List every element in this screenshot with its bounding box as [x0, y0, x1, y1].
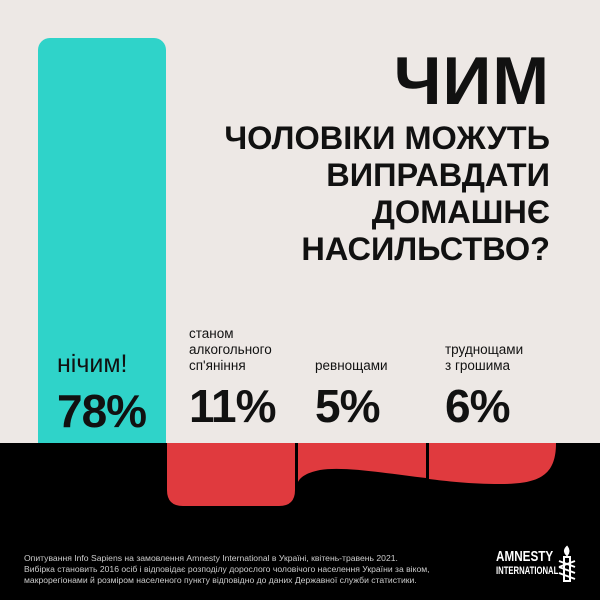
- logo: Amnesty International: INTERNATIONAL: [496, 565, 558, 577]
- stat: alcohol 11%: [189, 326, 276, 432]
- title: ВИПРАВДАТИ: [326, 157, 550, 193]
- footnote: Вибірка становить 2016 осіб і відповідає розподілу дорослого чоловічого населення України за віком,: [24, 564, 430, 574]
- red bar: money: [429, 443, 556, 484]
- title: [224, 43, 550, 267]
- icon: candle in barbed wire: [558, 546, 576, 582]
- title: ЧИМ: [394, 43, 550, 119]
- title: ЧОЛОВІКИ МОЖУТЬ: [224, 120, 550, 156]
- stat: money 6%: [445, 342, 523, 432]
- stat: money 6%: труднощами: [445, 342, 523, 357]
- cyan bar: nothing: [38, 38, 166, 443]
- logo: Amnesty International: [496, 546, 576, 582]
- stat: jealousy 5%: 5%: [315, 380, 379, 432]
- stat: alcohol 11%: станом: [189, 326, 234, 341]
- stat: alcohol 11%: алкогольного: [189, 342, 272, 357]
- title: НАСИЛЬСТВО?: [301, 231, 550, 267]
- stat: alcohol 11%: 11%: [189, 380, 276, 432]
- stat: alcohol 11%: сп'яніння: [189, 358, 246, 373]
- stat: nothing 78%: [57, 350, 146, 437]
- stat: jealousy 5%: ревнощами: [315, 358, 388, 373]
- black bottom band: [0, 443, 600, 600]
- title: ДОМАШНЄ: [372, 194, 550, 230]
- logo: Amnesty International: AMNESTY: [496, 548, 553, 565]
- stat: nothing 78%: 78%: [57, 385, 146, 437]
- footnote: Опитування Info Sapiens на замовлення Amnesty International в Україні, квітень-травень 2021.: [24, 553, 398, 563]
- red bar: jealousy: [298, 443, 426, 482]
- footnote: макрорегіонами й розміром населеного пункту відповідно до даних Державної служби статистики.: [24, 575, 417, 585]
- footnote: [24, 553, 430, 585]
- stat: jealousy 5%: [315, 358, 388, 432]
- red bar: alcohol: [167, 443, 295, 506]
- stat: money 6%: з грошима: [445, 358, 510, 373]
- stat: nothing 78%: нічим!: [57, 350, 127, 378]
- stat: money 6%: 6%: [445, 380, 509, 432]
